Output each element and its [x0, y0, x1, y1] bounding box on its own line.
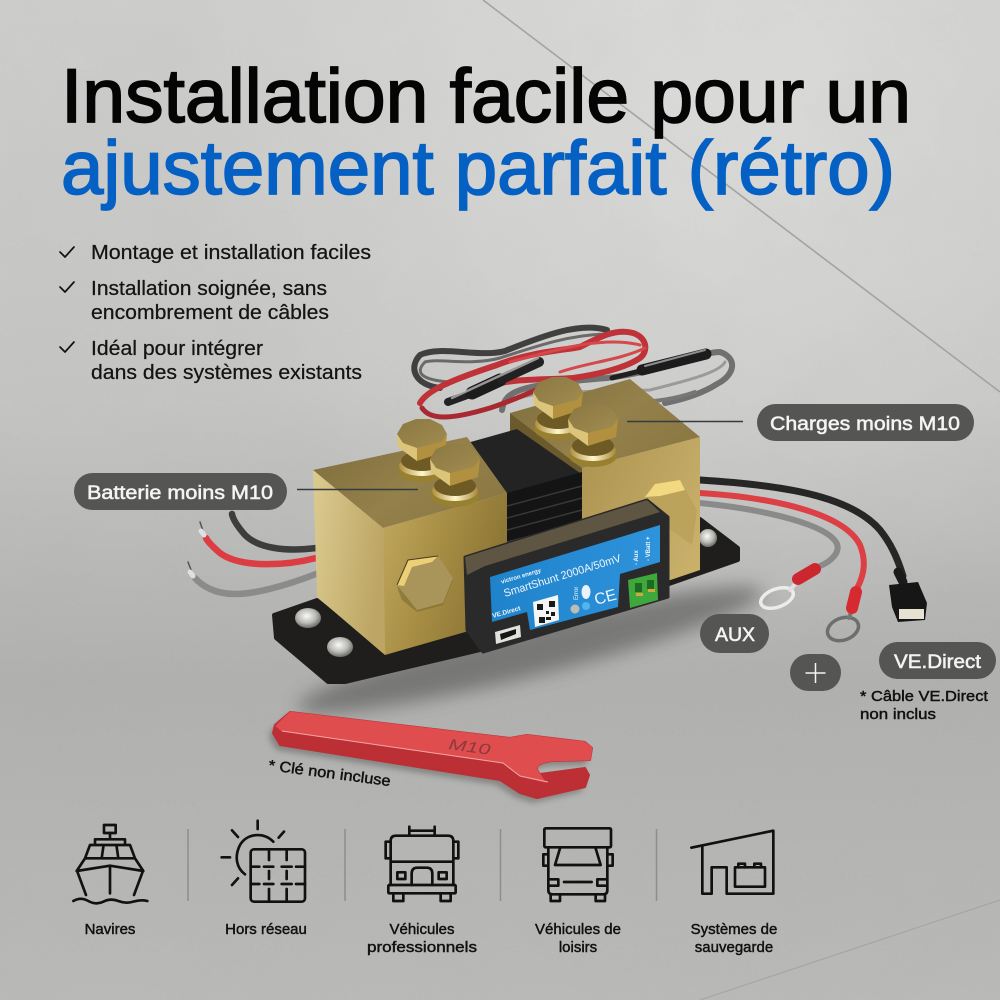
label: Hors réseau: Hors réseau — [225, 921, 307, 938]
module text: VE.Direct — [492, 605, 522, 620]
module text: victron energy — [501, 568, 543, 586]
wires: left side — [188, 514, 316, 594]
base plate — [274, 519, 738, 682]
feature list: Montage et installation faciles — [91, 242, 371, 264]
label: leisure vehicles: Véhicules de — [535, 921, 621, 938]
side bolts — [397, 480, 697, 612]
QR code — [533, 595, 559, 627]
wires: rear coils — [414, 328, 732, 417]
VE.Direct connector — [889, 572, 927, 622]
plus ring terminal — [824, 592, 862, 645]
label: plus — [790, 654, 841, 691]
icon: battery backup building — [691, 831, 773, 894]
label: VE.Direct: VE.Direct — [894, 651, 982, 673]
brass block: left — [313, 437, 507, 655]
feature list: Installation soignée, sans — [91, 278, 327, 300]
icon: motorhome — [543, 828, 613, 901]
base screws — [295, 529, 717, 657]
AUX ring terminal — [758, 569, 815, 612]
wires: right side with terminals — [700, 480, 927, 645]
label: professional vehicles: Véhicules — [389, 921, 455, 938]
label: professional vehicles: professionnels — [367, 939, 477, 956]
module text: - Aux — [634, 550, 640, 565]
label: Charges moins M10 — [757, 404, 974, 441]
module text: CE — [593, 587, 619, 609]
wrench — [269, 712, 592, 803]
module text: - VBatt + — [646, 536, 652, 561]
label: AUX: AUX — [715, 624, 755, 646]
wrench: M10 — [447, 736, 492, 759]
fuse holders — [448, 350, 706, 402]
label: professional vehicles — [367, 921, 477, 956]
icon: commercial truck — [386, 827, 458, 901]
module text: Error — [574, 587, 580, 600]
label: Navires: Navires — [85, 921, 135, 938]
title: Installation facile pour un — [61, 54, 911, 139]
label: Charges moins M10: Charges moins M10 — [770, 413, 960, 435]
SmartShunt module — [465, 500, 668, 652]
icon row dividers — [188, 829, 656, 901]
note: VE.Direct cable — [860, 688, 989, 723]
status LEDs — [570, 585, 590, 614]
label: backup systems: sauvegarde — [695, 939, 773, 956]
label: leisure vehicles: loisirs — [559, 939, 597, 956]
label: backup systems — [691, 921, 777, 956]
feature list — [60, 242, 371, 384]
note: wrench not included: * Clé non incluse — [267, 757, 392, 790]
module blue label — [490, 525, 660, 630]
label: Batterie moins M10: Batterie moins M10 — [87, 482, 273, 504]
leader lines — [297, 422, 743, 490]
title — [61, 54, 911, 211]
brass bolts — [397, 377, 618, 507]
VE.Direct port — [495, 625, 521, 644]
icon: ship — [73, 825, 147, 903]
note: VE.Direct cable: non inclus — [860, 706, 936, 723]
label: AUX — [700, 614, 769, 653]
shunt: black bar — [467, 429, 582, 556]
note: VE.Direct cable: * Câble VE.Direct — [860, 688, 989, 705]
title: ajustement parfait (rétro) — [61, 126, 895, 211]
label: backup systems: Systèmes de — [691, 921, 777, 938]
device shadow — [291, 567, 769, 733]
green terminal block — [628, 573, 658, 608]
module text: SmartShunt 2000A/50mV — [502, 553, 623, 600]
label: Batterie moins M10 — [74, 473, 287, 510]
brass block: right — [510, 379, 700, 610]
feature list: Idéal pour intégrer — [91, 338, 263, 360]
feature list: encombrement de câbles — [91, 302, 329, 324]
label: VE.Direct — [879, 642, 996, 679]
feature list: dans des systèmes existants — [91, 362, 362, 384]
icon: solar panel — [222, 821, 305, 902]
module text — [492, 536, 652, 620]
label: leisure vehicles — [535, 921, 621, 956]
